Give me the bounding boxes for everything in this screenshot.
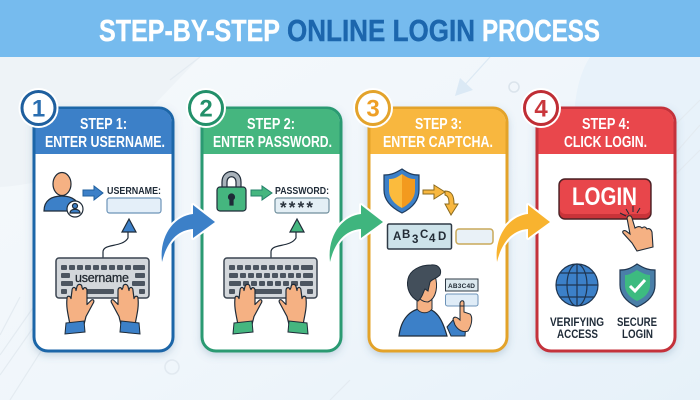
input: captcha field — [456, 229, 493, 244]
title — [99, 13, 600, 48]
arrow: step 3 to step 4 — [497, 205, 550, 262]
captcha image: C — [420, 229, 428, 241]
badge: number 3: 3 — [366, 96, 380, 122]
input: password field — [275, 198, 329, 217]
mini captcha and input: AB3C4D — [448, 283, 475, 290]
captcha image — [388, 224, 452, 249]
captcha image: A — [393, 231, 401, 243]
label: secure login: LOGIN — [622, 327, 653, 341]
heading: step 4: STEP 4: — [582, 116, 630, 133]
arrow: keyboard to field — [103, 219, 136, 258]
badge: number 1 — [18, 88, 58, 128]
icon: hands — [65, 284, 140, 334]
panel: step 1 — [34, 108, 173, 351]
captcha image: 4 — [429, 233, 436, 245]
arrow: keyboard to password field — [271, 219, 304, 258]
heading: step 3 — [383, 116, 493, 151]
icon: person entering captcha — [399, 265, 472, 336]
label: verifying access — [550, 315, 604, 341]
badge: number 2 — [186, 88, 226, 128]
panel: step 2 — [202, 108, 341, 351]
badge: number 4: 4 — [534, 96, 548, 122]
heading: step 3: STEP 3: — [415, 116, 462, 133]
input: password field: **** — [280, 198, 313, 217]
arrow: to password field — [251, 186, 272, 200]
captcha image: D — [438, 231, 446, 243]
icon: keyboard with username — [56, 258, 149, 298]
label: username: USERNAME: — [107, 186, 161, 197]
input: username field — [107, 198, 161, 213]
heading: step 1: ENTER USERNAME. — [45, 134, 165, 151]
label: secure login: SECURE — [617, 315, 657, 329]
title: STEP-BY-STEP — [99, 13, 280, 48]
heading: step 3: ENTER CAPTCHA. — [383, 134, 493, 151]
heading: step 1 — [45, 116, 165, 151]
title: ONLINE LOGIN — [287, 13, 475, 48]
icon: secure shield — [620, 264, 655, 307]
mini captcha and input — [446, 279, 478, 306]
badge: number 1: 1 — [32, 96, 45, 122]
captcha image: B — [402, 229, 410, 241]
icon: globe — [556, 264, 598, 306]
icon: padlock — [217, 172, 246, 211]
heading: step 2 — [213, 116, 332, 151]
icon: user profile — [44, 172, 83, 217]
title: PROCESS — [482, 13, 600, 48]
badge: number 4 — [521, 88, 561, 128]
arrow: step 2 to step 3 — [330, 205, 383, 262]
heading: step 4 — [564, 116, 647, 151]
icon: keyboard with username: username — [75, 271, 129, 285]
icon: pointing hand — [620, 206, 653, 251]
heading: step 2: STEP 2: — [247, 116, 295, 133]
label: secure login — [617, 315, 657, 341]
badge: number 2: 2 — [199, 96, 213, 122]
heading: step 1: STEP 1: — [80, 116, 127, 133]
login button — [559, 179, 651, 219]
badge: number 3 — [353, 88, 393, 128]
label: verifying access: ACCESS — [557, 327, 598, 341]
header banner — [0, 0, 700, 57]
label: password: PASSWORD: — [275, 186, 329, 197]
panel: step 4 — [537, 108, 675, 351]
icon: shield — [384, 169, 419, 213]
arrow: step 1 to step 2 — [162, 205, 215, 262]
captcha image: 3 — [412, 234, 418, 246]
icon: keyboard — [224, 258, 317, 298]
arrow: to username field — [83, 186, 103, 200]
heading: step 2: ENTER PASSWORD. — [213, 134, 332, 151]
heading: step 4: CLICK LOGIN. — [564, 134, 647, 151]
panel: step 3 — [369, 108, 507, 351]
arrow: shield to captcha — [423, 185, 458, 215]
label: verifying access: VERIFYING — [550, 315, 604, 329]
login button: LOGIN — [572, 183, 637, 211]
icon: hands typing — [233, 284, 308, 334]
